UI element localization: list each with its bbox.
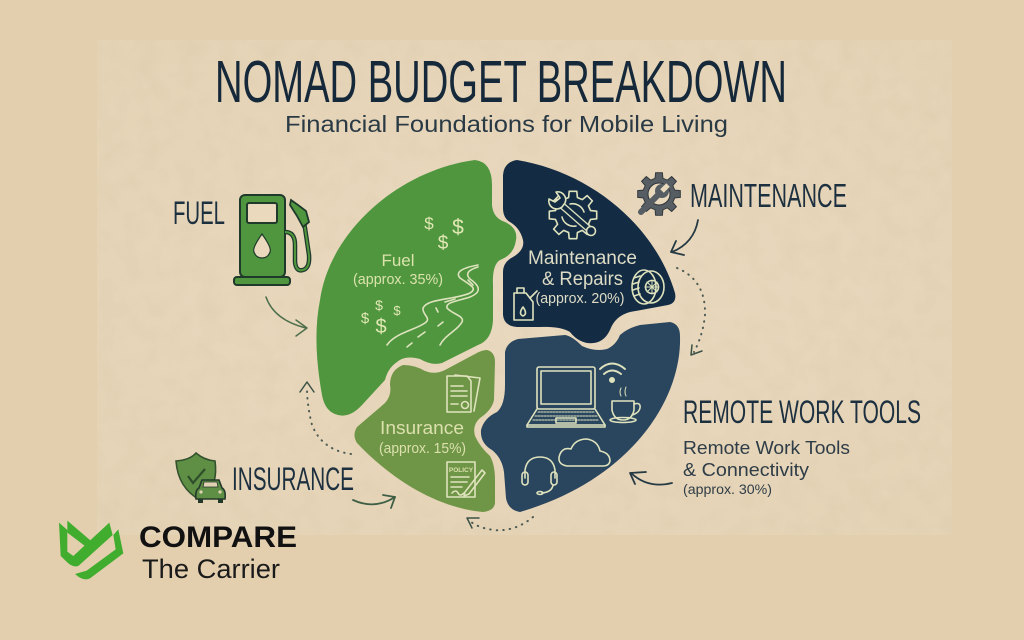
icon: winding road [387, 265, 478, 347]
icon: oil can [514, 288, 537, 320]
fuel percent: (approx. 35%) [353, 271, 443, 288]
icon: headset [522, 457, 557, 494]
remote work description: (approx. 30%) [683, 481, 772, 497]
icon: dollar signs: $ [361, 310, 370, 327]
arrow: dotted remote to insurance [467, 517, 533, 530]
icon: dollar signs: $ [438, 233, 449, 254]
icon: laptop [527, 367, 605, 427]
icon: coffee cup [610, 387, 640, 422]
icon: gear with wrench [638, 173, 680, 215]
label: insurance: INSURANCE [232, 461, 354, 497]
logo wordmark: COMPARE [139, 521, 297, 554]
icon: cloud [559, 439, 610, 466]
arrow: to remote work [630, 472, 672, 485]
icon: gear and wrench [549, 191, 597, 239]
icon: fuel pump [234, 195, 309, 285]
arrow: dotted insurance to fuel [300, 382, 351, 454]
remote work description: Remote Work Tools [683, 437, 850, 458]
arrow: to maintenance [671, 220, 698, 255]
arrow: to fuel [266, 297, 307, 336]
icon: tire [632, 270, 664, 304]
insurance label: Insurance [380, 418, 464, 438]
label: maintenance: MAINTENANCE [690, 177, 847, 214]
panel: paper background [97, 40, 952, 535]
icon: policy document [447, 462, 485, 497]
icon: shield with car [176, 453, 225, 503]
icon: dollar signs: $ [375, 316, 387, 338]
panel: maintenance segment [503, 160, 675, 343]
fuel label: Fuel [381, 251, 415, 270]
icon: dollar signs: $ [424, 214, 434, 233]
label: fuel: FUEL [173, 195, 225, 231]
maintenance label: Maintenance [528, 248, 637, 269]
panel: remote work segment [481, 322, 680, 512]
icon: dollar signs: $ [375, 297, 383, 313]
logo: compare the carrier [59, 521, 297, 584]
repairs label: & Repairs [542, 269, 623, 290]
icon: policy document: POLICY [449, 467, 474, 474]
remote work description: & Connectivity [683, 459, 810, 480]
arrow: to insurance [353, 495, 395, 508]
panel: insurance segment [354, 350, 495, 512]
icon: dollar signs: $ [393, 303, 401, 318]
icon: wifi [600, 364, 625, 382]
subtitle: Financial Foundations for Mobile Living [285, 111, 728, 137]
logo tagline: The Carrier [142, 554, 280, 584]
insurance percent: (approx. 15%) [379, 440, 466, 457]
icon: dollar signs: $ [452, 216, 464, 239]
icon: document [447, 375, 480, 412]
remote work description [683, 437, 850, 497]
maintenance percent: (approx. 20%) [536, 290, 624, 307]
arrow: dotted maintenance to remote [677, 268, 705, 355]
panel: fuel segment [316, 160, 516, 416]
icon: dollar signs [361, 214, 464, 338]
icon: logo mark [59, 521, 123, 579]
